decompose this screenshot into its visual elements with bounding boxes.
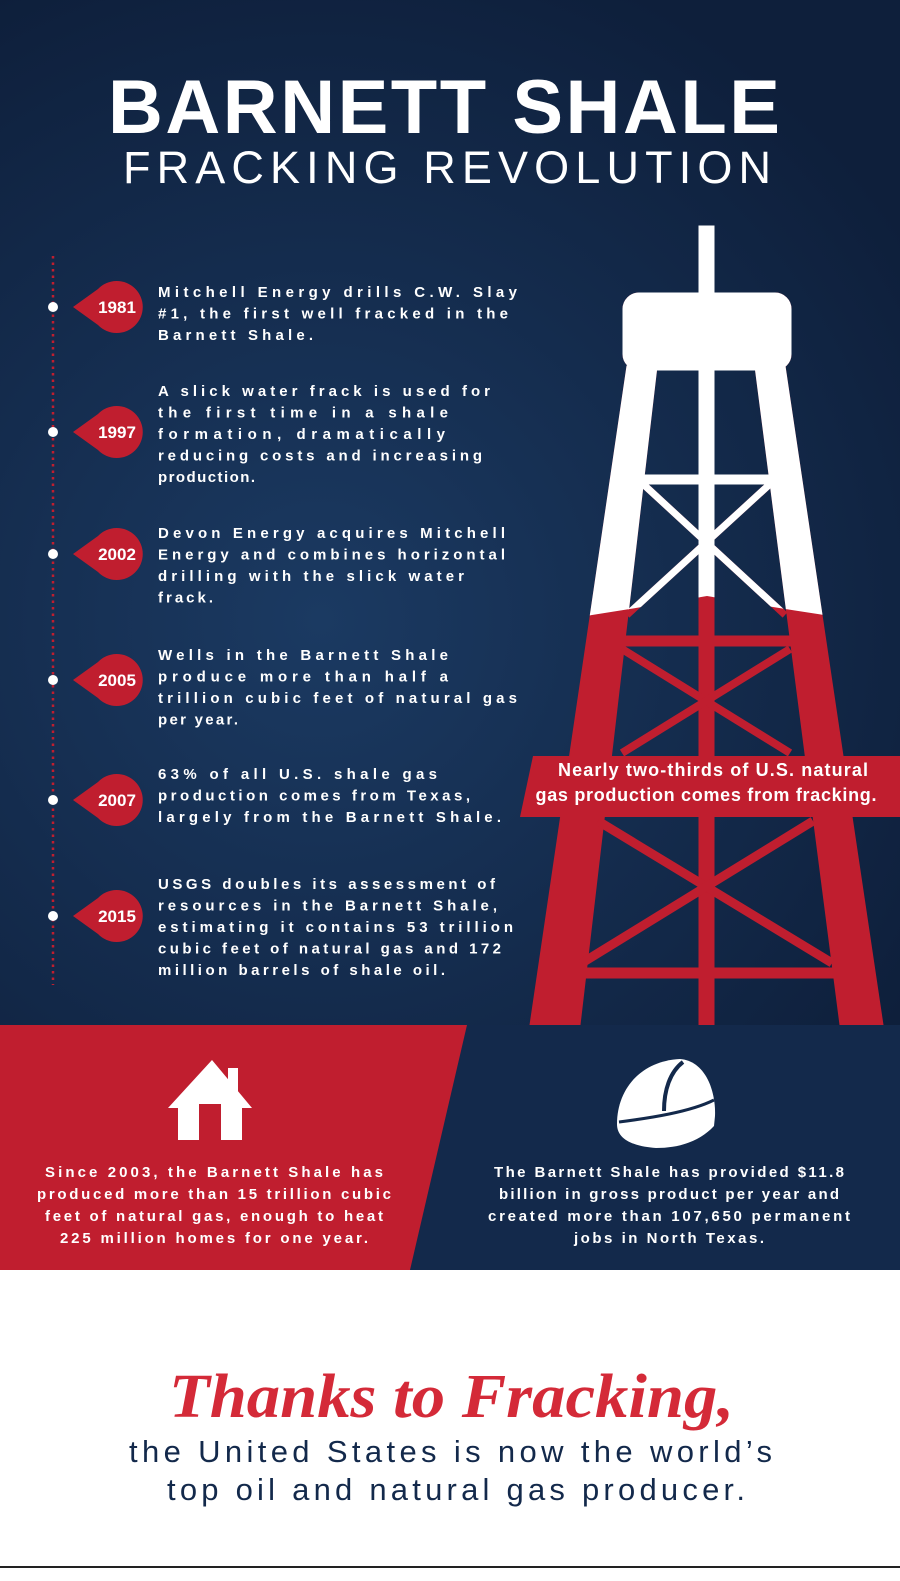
marker 2005 — [48, 654, 143, 706]
marker 1981 — [48, 281, 143, 333]
text 2015: cubic feet of natural gas and 172 — [158, 940, 501, 958]
title: BARNETT SHALE — [108, 65, 780, 150]
marker 2015: 2015 — [98, 907, 136, 926]
text: homes: 225 million homes for one year. — [60, 1230, 368, 1247]
marker 2002 — [48, 528, 143, 580]
panel: homes (red) — [0, 1025, 467, 1270]
text 1997: A slick water frack is used for — [158, 383, 490, 400]
text 1997: the first time in a shale — [158, 404, 448, 422]
marker 2007 — [48, 774, 143, 826]
text 2007 — [158, 766, 501, 826]
text: homes: produced more than 15 trillion cubic — [37, 1186, 391, 1203]
icon: house — [168, 1060, 252, 1140]
text 2007: production comes from Texas, — [158, 788, 470, 804]
timeline line — [52, 256, 54, 985]
text: jobs: The Barnett Shale has provided $11.8 — [494, 1164, 844, 1181]
text 2005: Wells in the Barnett Shale — [158, 647, 448, 664]
footer script heading: Thanks to Fracking, — [169, 1363, 734, 1431]
text 2005: per year. — [158, 712, 238, 728]
panel: jobs (navy) — [0, 1025, 900, 1270]
text 2015: estimating it contains 53 trillion — [158, 919, 513, 936]
text: jobs — [488, 1164, 850, 1247]
footer text: top oil and natural gas producer. — [167, 1472, 745, 1507]
marker 2015 — [48, 890, 143, 942]
timeline text — [158, 284, 518, 979]
text: jobs: jobs in North Texas. — [573, 1230, 764, 1247]
text: jobs: billion in gross product per year and — [499, 1186, 839, 1203]
timeline markers — [48, 281, 143, 942]
text 2015 — [158, 876, 513, 979]
derrick — [530, 226, 883, 1025]
title: FRACKING REVOLUTION — [123, 142, 771, 193]
footer text — [129, 1434, 772, 1507]
text 2005 — [158, 647, 517, 728]
text: jobs: created more than 107,650 permanent — [488, 1208, 850, 1225]
text 1981: Barnett Shale. — [158, 327, 313, 344]
marker 1997 — [48, 406, 143, 458]
text 2007: 63% of all U.S. shale gas — [158, 766, 437, 783]
text 2007: largely from the Barnett Shale. — [158, 809, 501, 826]
text: homes: Since 2003, the Barnett Shale has — [45, 1164, 383, 1181]
footer background — [0, 1270, 900, 1581]
text 2002 — [158, 525, 505, 606]
text: homes — [37, 1164, 391, 1247]
text 2002: drilling with the slick water — [158, 568, 464, 585]
text 1997: reducing costs and increasing — [158, 448, 482, 464]
text 2002: frack. — [158, 590, 213, 606]
banner callout: Nearly two-thirds of U.S. natural — [558, 760, 868, 780]
text 2005: produce more than half a — [158, 668, 449, 686]
text 1997: formation, dramatically — [158, 426, 446, 443]
text 2002: Devon Energy acquires Mitchell — [158, 525, 505, 542]
banner callout — [520, 756, 900, 817]
text 2005: trillion cubic feet of natural gas — [158, 690, 517, 707]
marker 2002: 2002 — [98, 545, 136, 564]
text 2015: resources in the Barnett Shale, — [158, 898, 497, 914]
text 2002: Energy and combines horizontal — [158, 546, 505, 564]
text: homes: feet of natural gas, enough to heat — [45, 1208, 383, 1225]
background — [0, 0, 900, 1035]
title — [108, 65, 780, 193]
text 1997: production. — [158, 469, 255, 486]
footer text: the United States is now the world’s — [129, 1434, 772, 1469]
text 2015: million barrels of shale oil. — [158, 962, 445, 979]
text 1981 — [158, 284, 518, 344]
icon: hard hat — [617, 1059, 715, 1148]
banner callout: gas production comes from fracking. — [536, 785, 876, 805]
marker 1981: 1981 — [98, 298, 136, 317]
text 1981: Mitchell Energy drills C.W. Slay — [158, 284, 518, 301]
marker 1997: 1997 — [98, 423, 136, 442]
text 1997 — [158, 383, 490, 486]
marker 2007: 2007 — [98, 791, 136, 810]
text 2015: USGS doubles its assessment of — [158, 876, 496, 893]
text 1981: #1, the first well fracked in the — [158, 306, 508, 322]
marker 2005: 2005 — [98, 671, 136, 690]
